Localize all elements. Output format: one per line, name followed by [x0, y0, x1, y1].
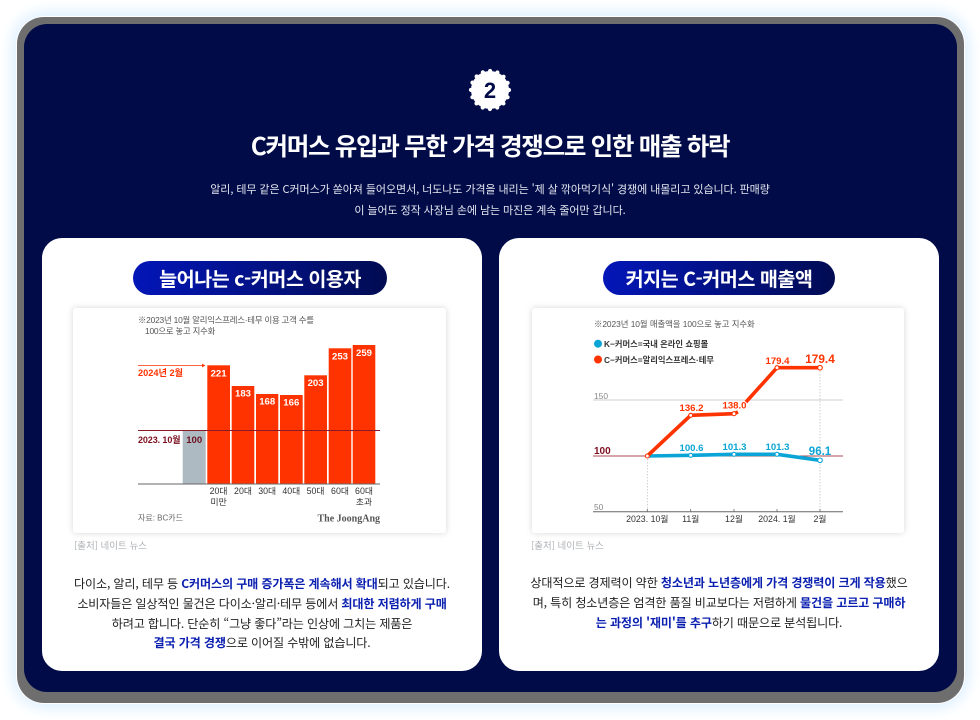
line chart note: ※2023년 10월 매출액을 100으로 놓고 지수화: [594, 319, 755, 329]
C values: [679, 352, 835, 414]
bars: [207, 345, 375, 484]
x labels: 11월: [682, 513, 699, 524]
source caption right: [출처] 네이트 뉴스: [531, 538, 604, 552]
age labels: 20대: [210, 486, 228, 496]
chart note: ※2023년 10월 알리익스프레스·테무 이용 고객 수를: [138, 315, 314, 325]
source caption left: [출처] 네이트 뉴스: [74, 538, 147, 552]
bar values: 166: [283, 398, 299, 408]
intro text: 알리, 테무 같은 C커머스가 쏟아져 들어오면서, 너도나도 가격을 내리는 '제 살 깎아먹기식' 경쟁에 내몰리고 있습니다. 판매량: [210, 181, 770, 197]
bar values: 259: [356, 348, 372, 359]
age labels: 60대: [355, 486, 373, 496]
axis values: [594, 391, 608, 512]
C values: 138.0: [722, 400, 747, 412]
C values: 179.4: [765, 356, 790, 367]
C-commerce line: [647, 368, 820, 456]
bar values: 203: [308, 378, 324, 389]
K-commerce line: [647, 454, 820, 460]
age labels: 30대: [258, 486, 276, 496]
K values: 96.1: [809, 446, 832, 458]
age labels: 50대: [307, 486, 325, 496]
gridlines: [593, 400, 843, 512]
age labels: 40대: [282, 486, 300, 496]
age labels: 초과: [356, 497, 372, 507]
baseline bar 100: [183, 430, 206, 484]
axis value 100: 100: [594, 446, 611, 457]
icon: number badge: 2: [484, 78, 496, 103]
chart card: bar chart: [73, 308, 446, 533]
body text left: 소비자들은 일상적인 물건은 다이소·알리·테무 등에서 최대한 저렴하게 구매: [77, 595, 447, 612]
bar value 100: 100: [186, 435, 202, 446]
panel: c-commerce sales: [499, 238, 939, 671]
data points: [645, 365, 822, 463]
intro text: 이 늘어도 정작 사장님 손에 남는 마진은 계속 줄어만 갑니다.: [354, 202, 626, 218]
K values: [679, 442, 832, 458]
bar values: 253: [332, 352, 348, 362]
heading: sales pill: 커지는 C-커머스 매출액: [626, 263, 812, 292]
bar values: [211, 348, 372, 408]
C values: 136.2: [679, 403, 704, 414]
axis line: [138, 483, 380, 485]
x labels: 12월: [725, 513, 743, 524]
body text left: 결국 가격 경쟁으로 이어질 수밖에 없습니다.: [154, 634, 370, 651]
K values: 101.3: [722, 442, 747, 453]
heading: users pill: 늘어나는 c-커머스 이용자: [159, 263, 361, 292]
x labels: [626, 513, 826, 524]
body text right: 며, 특히 청소년층은 엄격한 품질 비교보다는 저렴하게 물건을 고르고 구매하: [533, 594, 905, 611]
body text right: [530, 574, 908, 631]
bar values: 221: [211, 368, 227, 380]
chart card: line chart: [532, 308, 904, 533]
title: C커머스 유입과 무한 가격 경쟁으로 인한 매출 하락: [251, 128, 729, 163]
body text left: 하려고 합니다. 단순히 “그냥 좋다”라는 인상에 그치는 제품은: [112, 615, 412, 632]
intro text: [210, 181, 770, 218]
axis values: 50: [594, 502, 604, 512]
age labels: 미만: [211, 497, 227, 507]
age labels: [210, 486, 373, 507]
x labels: 2023. 10월: [626, 513, 668, 524]
heading: sales pill: [603, 261, 835, 295]
axis values: 150: [594, 391, 608, 401]
K values: 100.6: [679, 443, 704, 454]
source note: 자료: BC카드: [138, 514, 183, 522]
age labels: 60대: [331, 486, 349, 496]
x labels: 2월: [814, 513, 826, 524]
axis ticks: [647, 509, 820, 512]
icon: number badge: [468, 68, 512, 112]
body text left: 다이소, 알리, 테무 등 C커머스의 구매 증가폭은 계속해서 확대되고 있습니다.: [74, 575, 450, 592]
heading: users pill: [133, 261, 387, 295]
label 2023: 2023. 10월: [138, 434, 180, 445]
legend: C−커머스=알리익스프레스·테무: [604, 355, 714, 365]
bar values: 183: [235, 388, 251, 400]
chart note: [138, 315, 314, 336]
panel: c-commerce users: [42, 238, 482, 671]
legend: [594, 339, 714, 365]
K values: 101.3: [765, 442, 790, 453]
age labels: 20대: [234, 486, 252, 496]
logo: The JoongAng: [317, 514, 380, 524]
label 2024: 2024년 2월: [138, 367, 183, 378]
chart note: 100으로 놓고 지수화: [145, 326, 216, 336]
x labels: 2024. 1월: [758, 513, 796, 524]
body text left: [74, 575, 450, 651]
C values: 179.4: [805, 352, 835, 366]
guide lines: [647, 368, 820, 511]
bar values: 168: [259, 396, 276, 408]
arrow 2024: [138, 364, 206, 367]
body text right: 상대적으로 경제력이 약한 청소년과 노년층에게 가격 경쟁력이 크게 작용했으: [530, 574, 908, 591]
body text right: 는 과정의 '재미'를 추구하기 때문으로 분석됩니다.: [596, 614, 842, 631]
reference line: [138, 430, 380, 432]
legend: K−커머스=국내 온라인 쇼핑몰: [604, 339, 709, 349]
